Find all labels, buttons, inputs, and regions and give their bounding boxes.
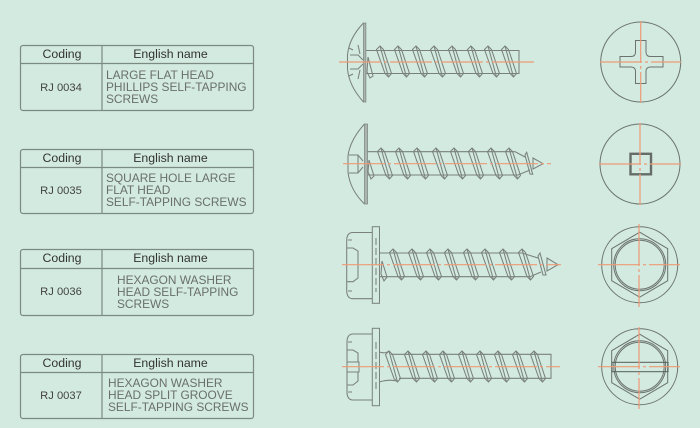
table: RJ 0036: SCREWS (117, 297, 169, 311)
table: RJ 0035: RJ 0035 (40, 185, 82, 197)
table: RJ 0036 (20, 250, 254, 316)
table: RJ 0035: SQUARE HOLE LARGE (106, 171, 236, 185)
table: RJ 0037: English name (133, 356, 208, 370)
table: RJ 0036: HEXAGON WASHER (117, 273, 232, 287)
table: RJ 0035: English name (133, 151, 208, 165)
table: RJ 0035: Coding (43, 151, 82, 165)
table: RJ 0037: HEAD SPLIT GROOVE (108, 388, 233, 402)
table: RJ 0036: RJ 0036 (40, 286, 82, 298)
table: RJ 0037: RJ 0037 (40, 390, 82, 402)
table: RJ 0034: PHILLIPS SELF-TAPPING (106, 80, 247, 94)
screw head view: cross recess (600, 21, 681, 103)
screw head view: hexagon slotted (598, 327, 680, 409)
table: RJ 0036: English name (133, 251, 208, 265)
table: RJ 0035: SELF-TAPPING SCREWS (106, 195, 247, 209)
table: RJ 0035: FLAT HEAD (106, 183, 171, 197)
screw head view: hexagon washer (598, 224, 680, 307)
screw side view: RJ 0037 (342, 328, 560, 406)
table: RJ 0036: HEAD SELF-TAPPING (117, 285, 238, 299)
table: RJ 0034: English name (133, 47, 208, 61)
table: RJ 0036: Coding (43, 251, 82, 265)
screw side view: RJ 0036 (342, 227, 561, 303)
table: RJ 0037: HEXAGON WASHER (108, 376, 223, 390)
table: RJ 0035 (20, 150, 254, 214)
table: RJ 0037: Coding (43, 356, 82, 370)
table: RJ 0034: SCREWS (106, 92, 158, 106)
table: RJ 0037: SELF-TAPPING SCREWS (108, 400, 249, 414)
table: RJ 0034: RJ 0034 (40, 82, 82, 94)
table: RJ 0034 (20, 46, 254, 110)
screw side view: RJ 0034 (339, 23, 534, 102)
table: RJ 0034: LARGE FLAT HEAD (106, 68, 214, 82)
table: RJ 0034: Coding (43, 47, 82, 61)
table: RJ 0037 (20, 354, 254, 418)
screw side view: RJ 0035 (343, 124, 551, 204)
screw head view: square recess (599, 123, 681, 205)
